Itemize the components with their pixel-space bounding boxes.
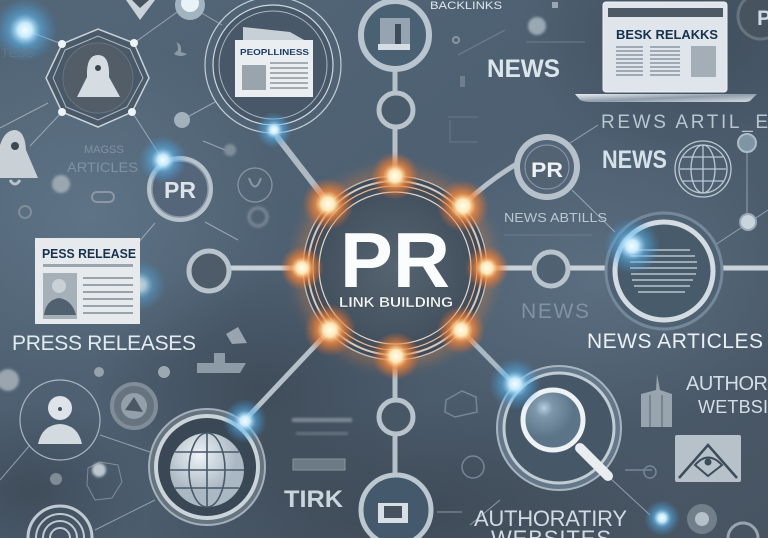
tirk label block <box>284 418 352 513</box>
ripple icon bottom-left <box>28 506 92 538</box>
connector ring left <box>189 251 229 291</box>
faint text: articles: TESS <box>1 46 34 60</box>
laptop: press release <box>575 2 757 102</box>
left bell icon <box>0 130 38 184</box>
bottom ring icon <box>361 475 431 538</box>
connector spokes <box>210 72 768 480</box>
authority websites right label: WETBSI <box>698 397 768 417</box>
top centre ring icon <box>361 1 429 69</box>
news label top: NEWS <box>487 55 560 83</box>
backlinks label: BACKLINKS <box>430 0 502 12</box>
press releases label: PRESS RELEASES <box>12 332 196 355</box>
authority websites right label <box>686 373 768 417</box>
magnifying glass <box>523 390 608 476</box>
laptop: press release: BESK RELAKKS <box>616 27 718 42</box>
person circle icon <box>20 380 100 460</box>
news articles grey heading: REWS ARTIL_E <box>601 112 768 133</box>
globe badge <box>149 399 267 525</box>
news articles faint label <box>504 210 607 235</box>
wire globe icon <box>675 141 731 197</box>
faint icons lower centre <box>445 391 656 478</box>
octagon bell icon <box>46 29 149 127</box>
PR badge right: PR <box>531 159 563 182</box>
lower connector ring <box>379 400 413 434</box>
faint news label: NEWS <box>521 300 589 323</box>
top-left blue node <box>0 0 57 62</box>
small nodes right <box>738 134 756 230</box>
magnifier badge <box>489 358 680 536</box>
connector ring right <box>534 252 568 286</box>
top right badge <box>738 0 768 39</box>
top node and pin <box>126 0 205 20</box>
faint text: articles: MAGSS <box>84 144 124 156</box>
PR badge right <box>514 134 580 200</box>
faint text: articles: ARTICLES <box>67 159 138 175</box>
building icon <box>641 374 672 427</box>
hub subtitle: LINK BUILDING <box>339 294 453 311</box>
hub title: PR <box>340 216 450 304</box>
PR badge left <box>139 136 213 222</box>
news articles faint label: NEWS ABTILLS <box>504 210 607 225</box>
faint text: articles <box>1 46 138 175</box>
avatar badge <box>112 384 156 428</box>
laptop base <box>575 94 757 102</box>
newspaper ring <box>205 0 341 148</box>
news label right: NEWS <box>602 146 667 174</box>
authority websites right label: AUTHOR <box>686 373 768 395</box>
orange glowing nodes <box>280 152 509 380</box>
PR badge left: PR <box>164 177 196 203</box>
press release card: PESS RELEASE <box>42 247 136 261</box>
faint icons lower-left <box>0 327 247 500</box>
authoritative websites label: AUTHORATIRY <box>474 506 627 531</box>
faint icons left <box>19 42 272 226</box>
central hub: PR Link Building <box>295 168 495 368</box>
upper connector ring <box>379 93 413 127</box>
website image icon <box>675 435 741 482</box>
small badges bottom right <box>687 504 758 538</box>
news article ring <box>604 213 722 329</box>
newspaper ring: PEOPLLINESS <box>240 47 309 57</box>
faint icons top middle <box>448 2 585 142</box>
news articles label: NEWS ARTICLES <box>587 330 763 353</box>
press release card <box>35 238 166 324</box>
tirk label block: TIRK <box>284 486 344 513</box>
